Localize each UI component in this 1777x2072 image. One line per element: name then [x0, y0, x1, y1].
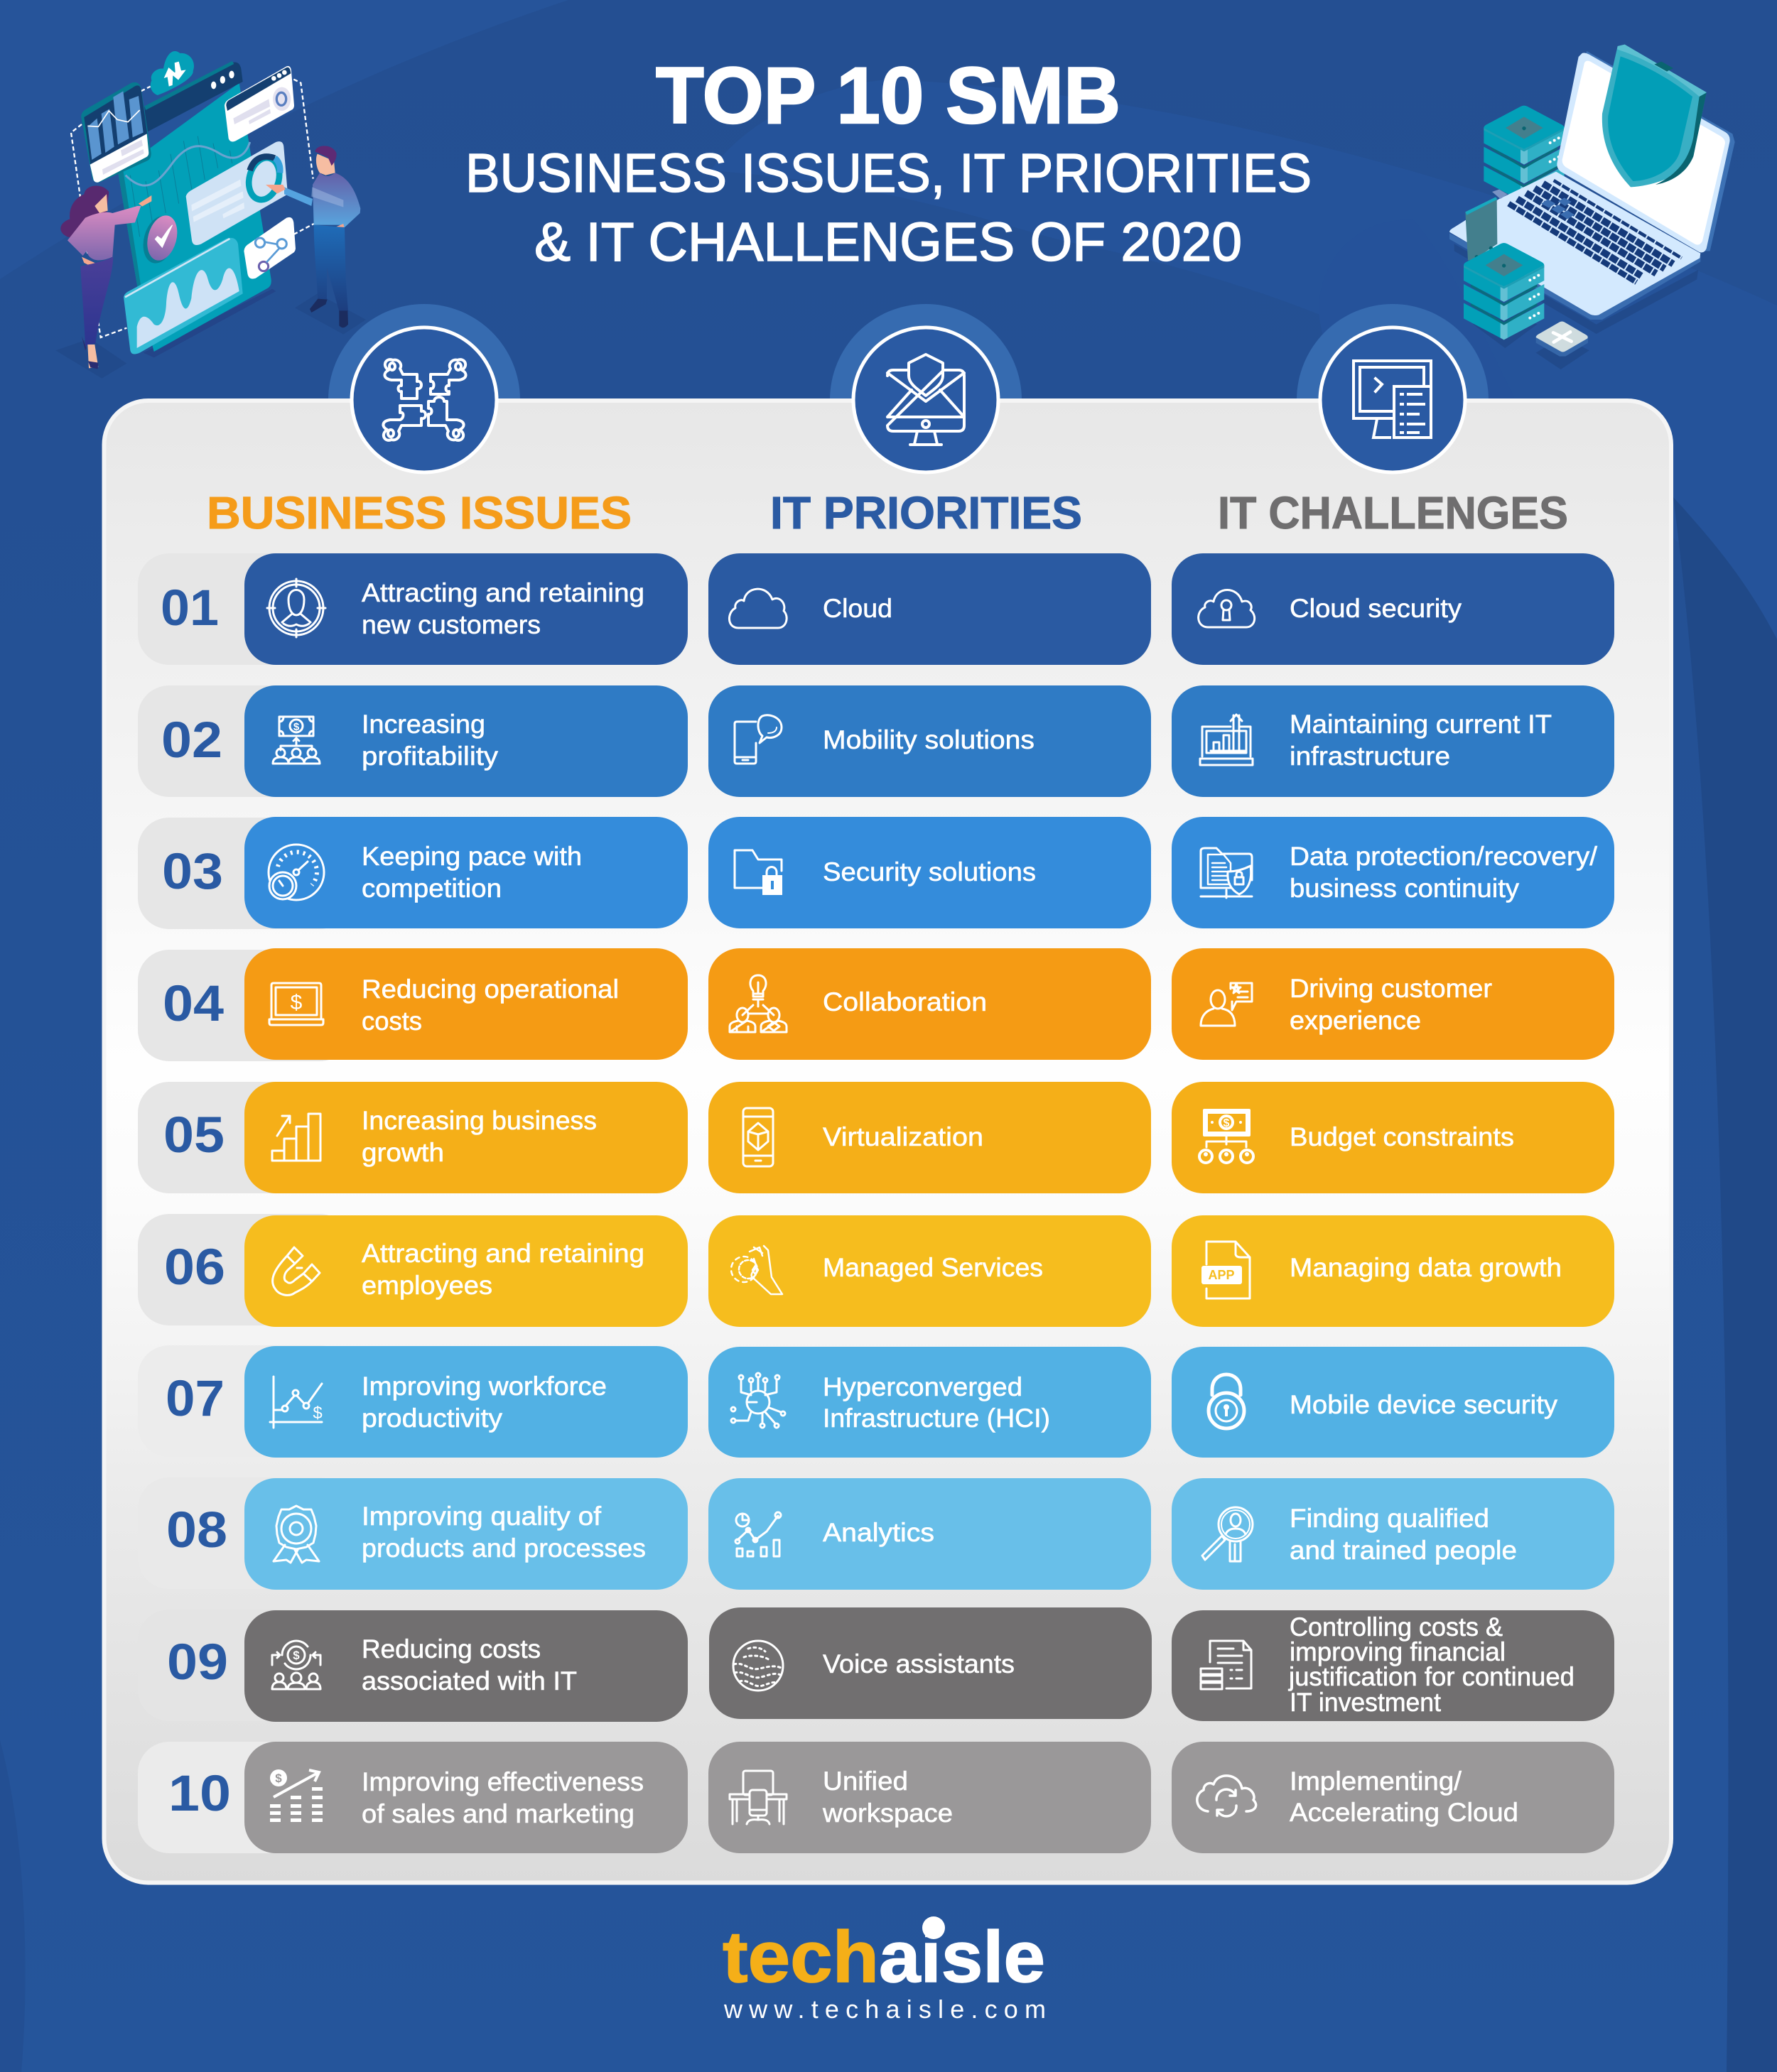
card: data protection: Data protection/recovery/ — [1290, 842, 1598, 871]
icon: shield mail monitor — [853, 327, 998, 472]
card: driving customer experience: Driving customer — [1290, 974, 1492, 1003]
icon: phone with bubble — [735, 715, 782, 764]
card: attracting customers: Attracting and retaining — [362, 578, 644, 607]
card: security solutions — [708, 817, 1151, 928]
icon: budget money people: $ — [1224, 1117, 1230, 1129]
card: virtualization — [708, 1082, 1151, 1193]
number tab 04 — [138, 950, 351, 1061]
icon: magnet — [273, 1247, 320, 1295]
card: reducing it costs: associated with IT — [362, 1666, 577, 1696]
icon: voice globe — [733, 1641, 783, 1691]
icon: cloud — [729, 589, 787, 628]
logo: techaisle — [723, 1916, 1045, 1997]
icon: phone cube — [743, 1108, 773, 1166]
icon halo: it priorities — [830, 304, 1022, 496]
icon: rosette — [274, 1506, 319, 1563]
icon: monitor and server list — [1320, 327, 1465, 472]
card: improving quality: products and processes — [362, 1534, 646, 1563]
card: reducing operational costs: costs — [362, 1007, 422, 1036]
icon: circuit — [731, 1373, 785, 1428]
icon: bulb network — [730, 975, 787, 1032]
card: increasing profitability: profitability — [362, 742, 499, 771]
icon halo: it challenges — [1297, 304, 1489, 496]
card: finding qualified people: and trained people — [1290, 1536, 1517, 1565]
icon: customer feedback — [1201, 983, 1252, 1026]
card: implementing accelerating cloud — [1172, 1742, 1614, 1853]
card: controlling costs: IT investment — [1290, 1688, 1442, 1717]
card: controlling costs: justification for continued — [1288, 1662, 1575, 1691]
card: increasing profitability: Increasing — [362, 710, 485, 739]
icon: laptop dollar: $ — [291, 991, 303, 1014]
card: mobility — [708, 685, 1151, 797]
icon: puzzle pieces — [352, 327, 497, 472]
number tab 02 — [138, 685, 351, 797]
number tab 03 — [138, 818, 351, 929]
card: reducing it costs — [244, 1610, 688, 1722]
card: controlling costs: improving financial — [1290, 1637, 1506, 1666]
number tab 05 — [138, 1082, 351, 1193]
card: budget constraints — [1172, 1082, 1614, 1193]
card: unified workspace — [708, 1742, 1151, 1853]
card: maintaining it infrastructure — [1172, 685, 1614, 797]
icon: chart dollar — [270, 1377, 323, 1428]
icon: growth bars — [272, 1114, 320, 1161]
icon: dollar arrow bars: $ — [275, 1772, 282, 1785]
icon: target person — [267, 579, 325, 637]
icon: money and people: $ — [293, 721, 300, 733]
icon: desk and chair — [730, 1771, 787, 1824]
card: cloud: Cloud — [823, 594, 892, 623]
card: keeping pace — [244, 817, 688, 928]
card: increasing profitability — [244, 685, 688, 797]
card: unified workspace: workspace — [822, 1799, 953, 1828]
title: BUSINESS ISSUES, IT PRIORITIES — [465, 143, 1312, 204]
icon: magnifier person — [1202, 1507, 1253, 1561]
card: finding qualified people: Finding qualified — [1290, 1504, 1489, 1533]
card: controlling costs — [1172, 1610, 1614, 1721]
card: cloud security — [1172, 553, 1614, 665]
card: hyperconverged — [708, 1347, 1151, 1458]
illustration: laptop with shield and servers — [1449, 45, 1735, 369]
card: increasing business growth: growth — [362, 1138, 444, 1167]
icon: folder lock — [735, 850, 782, 895]
card: security solutions: Security solutions — [823, 857, 1036, 886]
card: managing data growth: Managing data growth — [1290, 1253, 1562, 1282]
card: increasing business growth — [244, 1082, 688, 1193]
card: maintaining it infrastructure: Maintaining current IT — [1290, 710, 1552, 739]
card: improving quality: Improving quality of — [362, 1502, 602, 1531]
card: improving productivity — [244, 1346, 688, 1458]
card: mobility: Mobility solutions — [823, 725, 1035, 754]
icon halo: business issues — [328, 304, 520, 496]
number tab 05: 05 — [163, 1107, 225, 1164]
card: analytics: Analytics — [823, 1518, 934, 1547]
logo: techaisle: aisle — [879, 1916, 1045, 1997]
title: & IT CHALLENGES OF 2020 — [534, 212, 1242, 273]
woman figure — [60, 186, 109, 242]
card: mobile device security: Mobile device security — [1290, 1390, 1558, 1419]
card: voice assistants: Voice assistants — [823, 1649, 1015, 1678]
icon: chart dollar: $ — [313, 1404, 323, 1423]
number tab 02: 02 — [161, 712, 222, 769]
card: controlling costs: Controlling costs & — [1290, 1612, 1503, 1642]
card: finding qualified people — [1172, 1478, 1614, 1590]
card: virtualization: Virtualization — [823, 1122, 983, 1151]
icon: money cycle people: $ — [293, 1649, 300, 1662]
card: improving productivity: Improving workforce — [362, 1372, 607, 1401]
card: managing data growth — [1172, 1215, 1614, 1327]
card: improving productivity: productivity — [362, 1404, 503, 1433]
card: implementing accelerating cloud: Accelerating Cloud — [1290, 1798, 1518, 1827]
card: maintaining it infrastructure: infrastructure — [1290, 742, 1450, 771]
title — [465, 51, 1312, 273]
icon: laptop dollar — [269, 983, 323, 1025]
logo: techaisle: tech — [723, 1916, 879, 1997]
card: managed services — [708, 1215, 1151, 1327]
card: analytics — [708, 1478, 1151, 1590]
icon: analytics chart — [735, 1512, 781, 1556]
number tab 03: 03 — [162, 844, 223, 900]
card: data protection: business continuity — [1290, 874, 1520, 903]
panel: main table — [104, 327, 1671, 1882]
card: increasing business growth: Increasing business — [362, 1106, 597, 1135]
card: attracting employees: Attracting and retaining — [362, 1239, 644, 1268]
card: improving sales marketing: Improving effectiveness — [362, 1767, 644, 1796]
icon: money cycle people — [272, 1641, 320, 1689]
card: improving sales marketing: of sales and marketing — [362, 1799, 634, 1828]
card: implementing accelerating cloud: Implementing/ — [1290, 1767, 1462, 1796]
card: keeping pace: Keeping pace with — [362, 842, 582, 871]
card: managed services: Managed Services — [823, 1253, 1043, 1282]
number tab 08: 08 — [166, 1502, 227, 1558]
card: attracting customers: new customers — [362, 610, 541, 639]
icon: cloud keyhole — [1199, 590, 1255, 627]
card: attracting employees — [244, 1215, 688, 1327]
number tab 10 — [138, 1742, 351, 1853]
card: attracting employees: employees — [362, 1271, 492, 1300]
heading: business issues: BUSINESS ISSUES — [207, 487, 632, 538]
icon: budget money people — [1199, 1110, 1253, 1163]
card: unified workspace: Unified — [823, 1767, 908, 1796]
card: hyperconverged: Hyperconverged — [823, 1372, 1022, 1401]
card: collaboration — [708, 948, 1151, 1060]
card: hyperconverged: Infrastructure (HCI) — [823, 1404, 1050, 1433]
number tab 04: 04 — [163, 976, 225, 1032]
title: TOP 10 SMB — [656, 51, 1120, 140]
number tab 09: 09 — [167, 1634, 228, 1691]
number tab 07: 07 — [166, 1371, 225, 1427]
number tab 07 — [138, 1345, 351, 1457]
number tab 09 — [138, 1610, 351, 1721]
number tab 08 — [138, 1477, 351, 1589]
card: voice assistants — [709, 1607, 1152, 1719]
card: mobile device security — [1172, 1347, 1614, 1458]
number tab 10: 10 — [168, 1766, 231, 1822]
card: improving quality — [244, 1478, 688, 1590]
icon: cloud sync — [1197, 1776, 1256, 1816]
number tab 01: 01 — [161, 580, 219, 636]
icon: app file: APP — [1208, 1268, 1235, 1282]
card: reducing it costs: Reducing costs — [362, 1634, 541, 1664]
icon: app file — [1201, 1242, 1250, 1298]
illustration: analytics dashboard with two people — [55, 51, 366, 379]
icon: laptop chart arrow — [1200, 715, 1253, 765]
card: cloud — [708, 553, 1151, 665]
number tab 01 — [138, 553, 351, 665]
icon: dollar arrow bars — [270, 1769, 323, 1822]
number tab 06: 06 — [164, 1240, 225, 1296]
website url: www.techaisle.com — [723, 1995, 1046, 2024]
card: budget constraints: Budget constraints — [1290, 1122, 1514, 1151]
card: keeping pace: competition — [362, 874, 502, 903]
card: cloud security: Cloud security — [1290, 594, 1462, 623]
card: data protection — [1172, 817, 1614, 928]
icon: padlock — [1209, 1374, 1244, 1428]
man figure — [316, 154, 335, 175]
card: reducing operational costs: Reducing operational — [362, 975, 619, 1004]
heading: it challenges: IT CHALLENGES — [1218, 487, 1568, 538]
icon: money and people — [273, 717, 320, 764]
card: reducing operational costs — [244, 948, 688, 1060]
icon: hand with gear — [731, 1246, 782, 1294]
card: driving customer experience — [1172, 948, 1614, 1060]
icon: document coins — [1201, 1641, 1251, 1689]
card: improving sales marketing — [244, 1742, 688, 1853]
heading: it priorities: IT PRIORITIES — [770, 487, 1082, 538]
card: collaboration: Collaboration — [823, 987, 987, 1016]
card: attracting customers — [244, 553, 688, 665]
icon: folder document shield — [1201, 848, 1252, 898]
number tab 06 — [138, 1214, 351, 1325]
icon: speedometer — [269, 845, 324, 900]
card: driving customer experience: experience — [1290, 1006, 1421, 1035]
